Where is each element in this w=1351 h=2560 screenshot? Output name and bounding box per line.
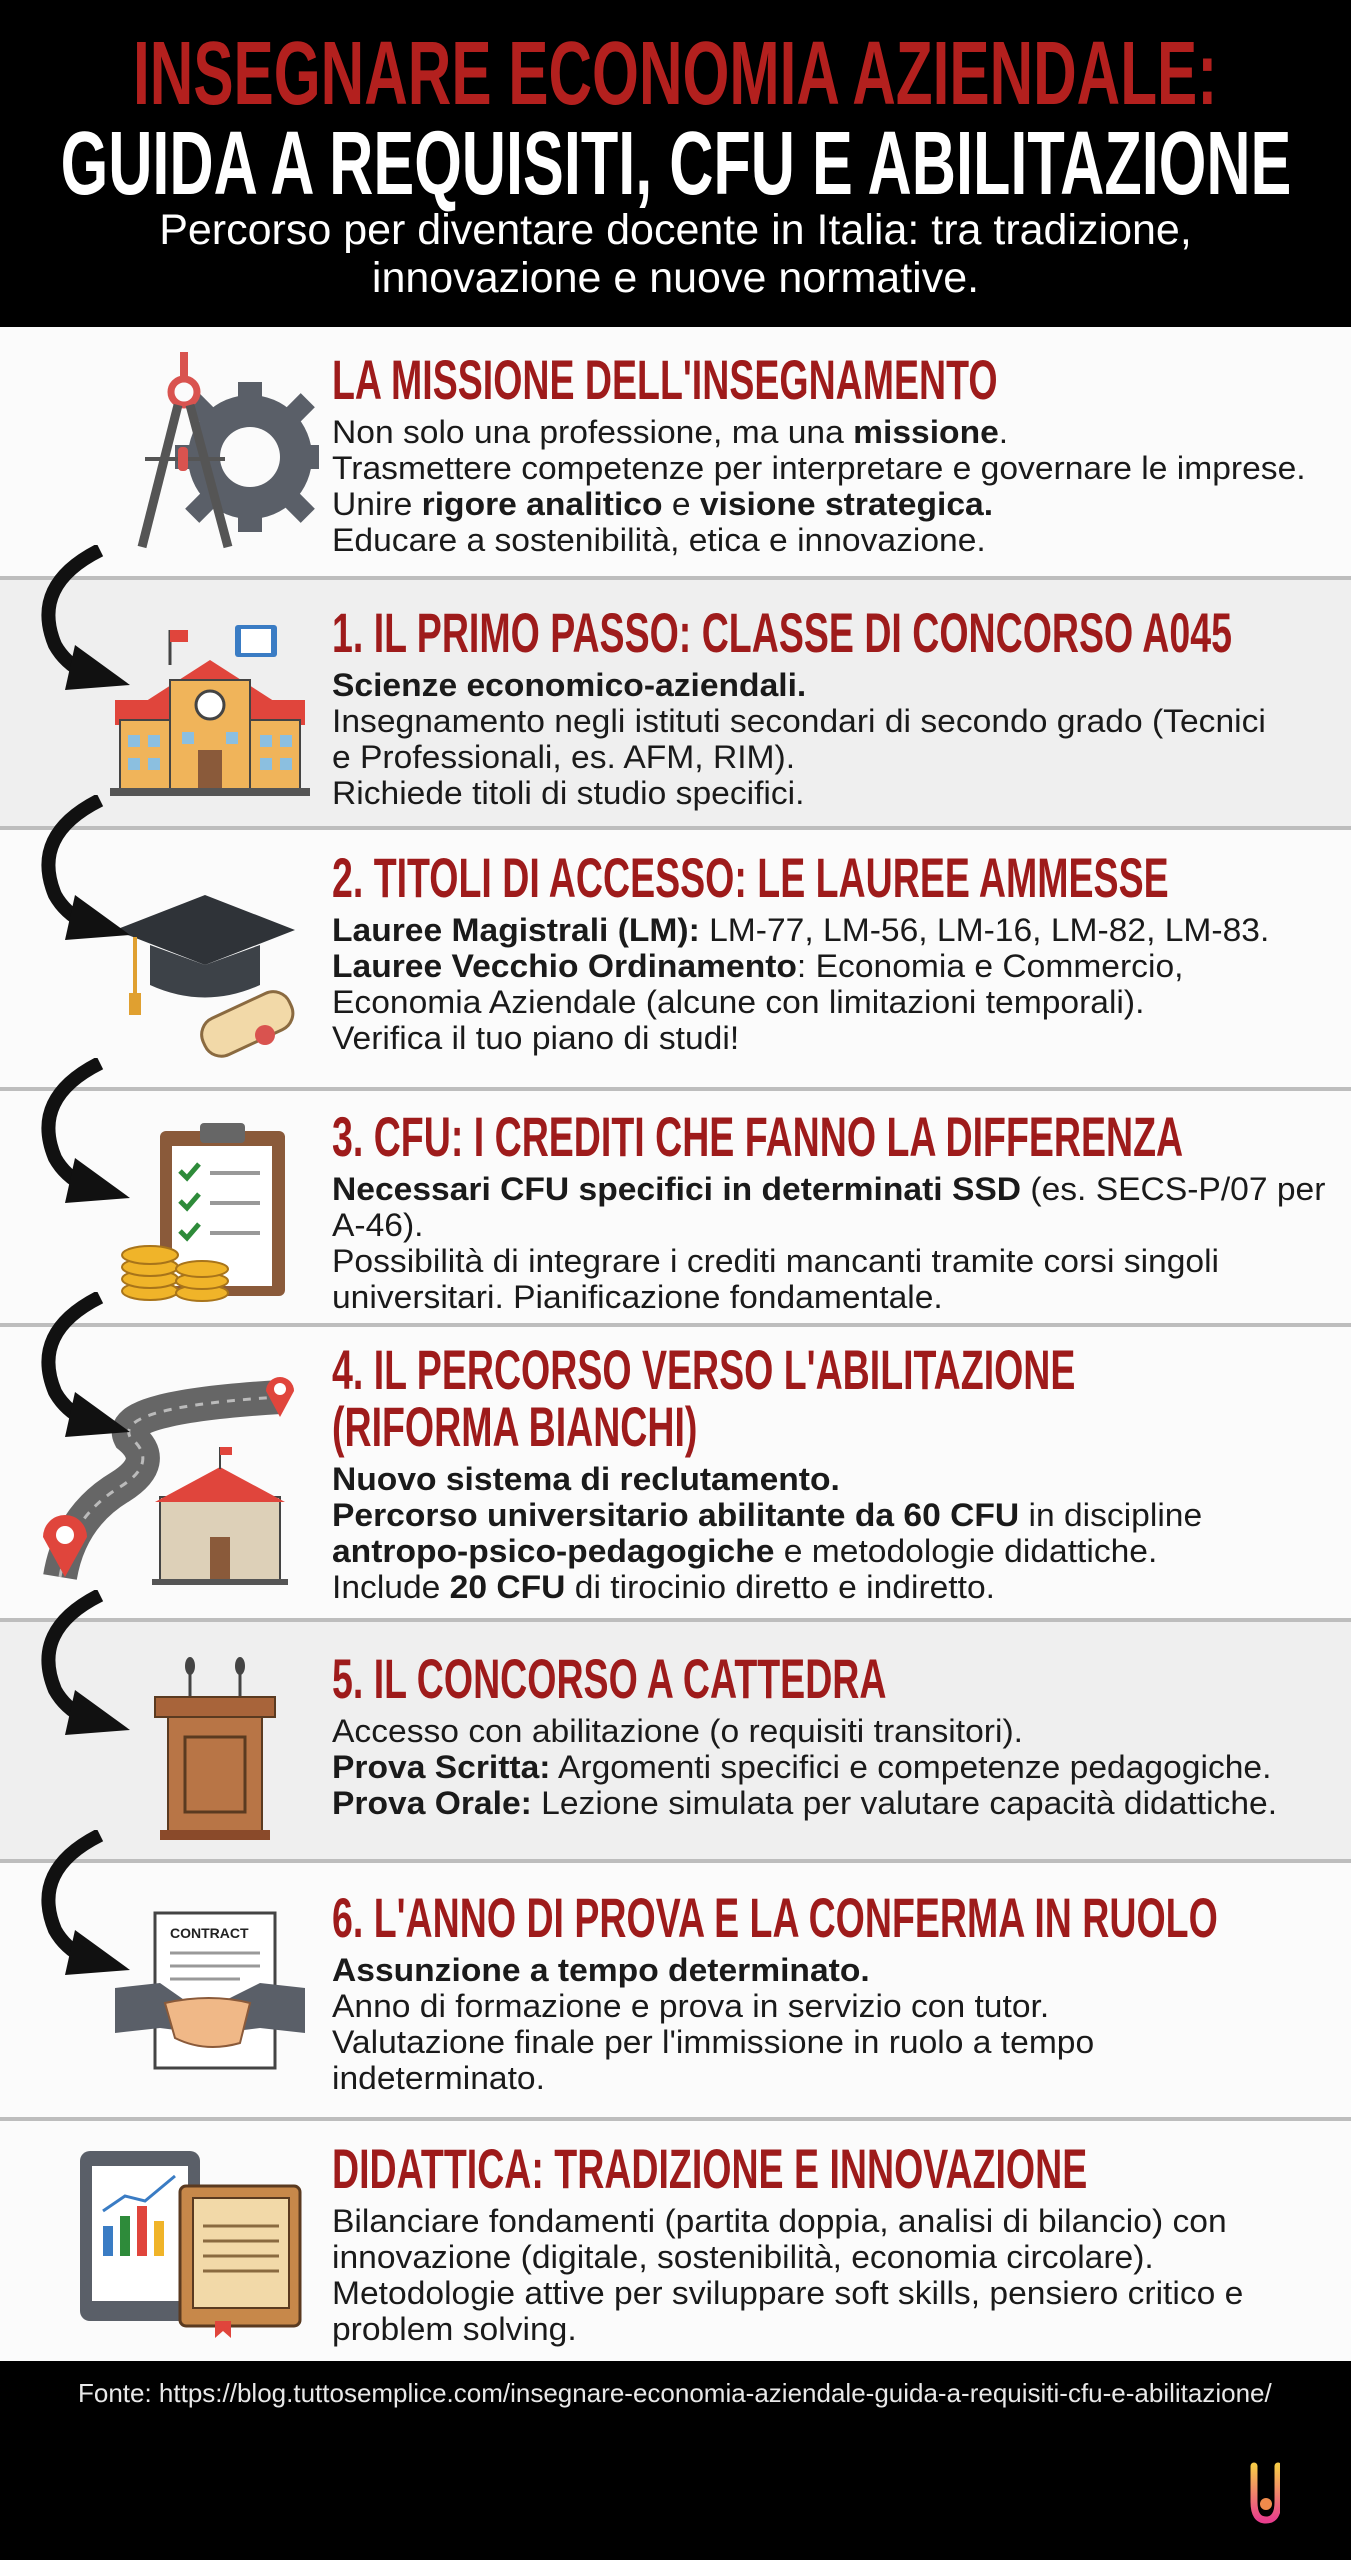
text: missione: Non solo una professione, ma una missione. [332,414,1008,450]
icon: contract handshake [115,1912,305,2070]
text: step 1: Insegnamento negli istituti secondari di secondo grado (Tecnici [332,703,1266,739]
text: step 1: 1. IL PRIMO PASSO: CLASSE DI CONCORSO A045 [332,601,1232,664]
text: step 3 [332,1105,1325,1315]
text: step 2: 2. TITOLI DI ACCESSO: LE LAUREE AMMESSE [332,846,1169,909]
text: step 4: antropo-psico-pedagogiche e metodologie didattiche. [332,1533,1157,1569]
arrow 4 [41,1292,130,1437]
text: step 5 [332,1647,1277,1821]
icon: logo [1250,2462,1280,2524]
text: step 6 [332,1886,1218,2096]
text: step 1: Richiede titoli di studio specifici. [332,775,804,811]
text: step 4: Include 20 CFU di tirocinio diretto e indiretto. [332,1569,995,1605]
text: step 5: Accesso con abilitazione (o requisiti transitori). [332,1713,1023,1749]
text: missione: Unire rigore analitico e visione strategica. [332,486,993,522]
text: step 3: Possibilità di integrare i crediti mancanti tramite corsi singoli [332,1243,1219,1279]
text: didattica: innovazione (digitale, sostenibilità, economia circolare). [332,2239,1154,2275]
text: step 5: Prova Scritta: Argomenti specifici e competenze pedagogiche. [332,1749,1271,1785]
text: step 3: 3. CFU: I CREDITI CHE FANNO LA DIFFERENZA [332,1105,1183,1168]
text: step 2: Economia Aziendale (alcune con limitazioni temporali). [332,984,1144,1020]
panel: step 6 [0,1863,1351,2121]
text: step 2: Verifica il tuo piano di studi! [332,1020,739,1056]
text: step 4: (RIFORMA BIANCHI) [332,1395,697,1458]
text: step 3: Necessari CFU specifici in determinati SSD (es. SECS-P/07 per [332,1171,1325,1207]
text: step 5: Prova Orale: Lezione simulata per valutare capacità didattiche. [332,1785,1277,1821]
panel: step 3 [0,1091,1351,1327]
text: step 6: Assunzione a tempo determinato. [332,1952,870,1988]
text: step 5: 5. IL CONCORSO A CATTEDRA [332,1647,886,1710]
text: didattica: problem solving. [332,2311,577,2347]
text: step 1: Scienze economico-aziendali. [332,667,806,703]
title line 2: GUIDA A REQUISITI, CFU E ABILITAZIONE [60,114,1291,214]
text: step 4 [332,1338,1202,1605]
text: step 1: e Professionali, es. AFM, RIM). [332,739,795,775]
text: step 4: 4. IL PERCORSO VERSO L'ABILITAZIONE [332,1338,1075,1401]
title line 1: INSEGNARE ECONOMIA AZIENDALE: [133,24,1218,124]
source text: Fonte: https://blog.tuttosemplice.com/insegnare-economia-aziendale-guida-a-requisiti-cfu-e-abilitazione/ [78,2378,1272,2408]
footer [0,2361,1351,2560]
panel: step 4 [0,1327,1351,1622]
arrow 2 [41,795,130,940]
text: step 6: Valutazione finale per l'immissione in ruolo a tempo [332,2024,1094,2060]
subtitle: Percorso per diventare docente in Italia: tra tradizione, [159,206,1192,254]
text: step 6: indeterminato. [332,2060,545,2096]
subtitle [159,206,1192,302]
icon: graduation cap [120,895,295,1058]
text: step 6: Anno di formazione e prova in servizio con tutor. [332,1988,1049,2024]
text: missione: LA MISSIONE DELL'INSEGNAMENTO [332,348,998,411]
icon: clipboard and coins [121,1123,285,1302]
text: step 2 [332,846,1269,1056]
icon: contract handshake: CONTRACT [170,1925,249,1941]
text: step 2: Lauree Vecchio Ordinamento: Economia e Commercio, [332,948,1183,984]
subtitle: innovazione e nuove normative. [372,254,979,302]
panel: missione [0,327,1351,580]
text: step 6: 6. L'ANNO DI PROVA E LA CONFERMA IN RUOLO [332,1886,1218,1949]
text: step 4: Percorso universitario abilitante da 60 CFU in discipline [332,1497,1202,1533]
icon: tablet and book [80,2151,302,2338]
text: missione: Educare a sostenibilità, etica e innovazione. [332,522,986,558]
panel: didattica [0,2121,1351,2361]
text: step 3: A-46). [332,1207,423,1243]
text: didattica: DIDATTICA: TRADIZIONE E INNOVAZIONE [332,2137,1087,2200]
panel: step 1 [0,580,1351,830]
arrow 5 [41,1590,130,1735]
panel: step 5 [0,1622,1351,1863]
icon: school [110,625,310,796]
text: step 4: Nuovo sistema di reclutamento. [332,1461,840,1497]
arrow 1 [41,545,130,690]
text: step 3: universitari. Pianificazione fondamentale. [332,1279,943,1315]
text: step 1 [332,601,1266,811]
icon: podium [154,1657,276,1840]
header [0,0,1351,327]
icon: compass and gear [138,352,319,548]
text: missione: Trasmettere competenze per interpretare e governare le imprese. [332,450,1306,486]
arrow 6 [41,1830,130,1975]
text: didattica: Metodologie attive per sviluppare soft skills, pensiero critico e [332,2275,1243,2311]
panel: step 2 [0,830,1351,1091]
text: didattica [332,2137,1243,2347]
text: didattica: Bilanciare fondamenti (partita doppia, analisi di bilancio) con [332,2203,1227,2239]
arrow 3 [41,1058,130,1203]
text: missione [332,348,1306,558]
text: step 2: Lauree Magistrali (LM): LM-77, LM-56, LM-16, LM-82, LM-83. [332,912,1269,948]
icon: road and university [43,1377,294,1585]
